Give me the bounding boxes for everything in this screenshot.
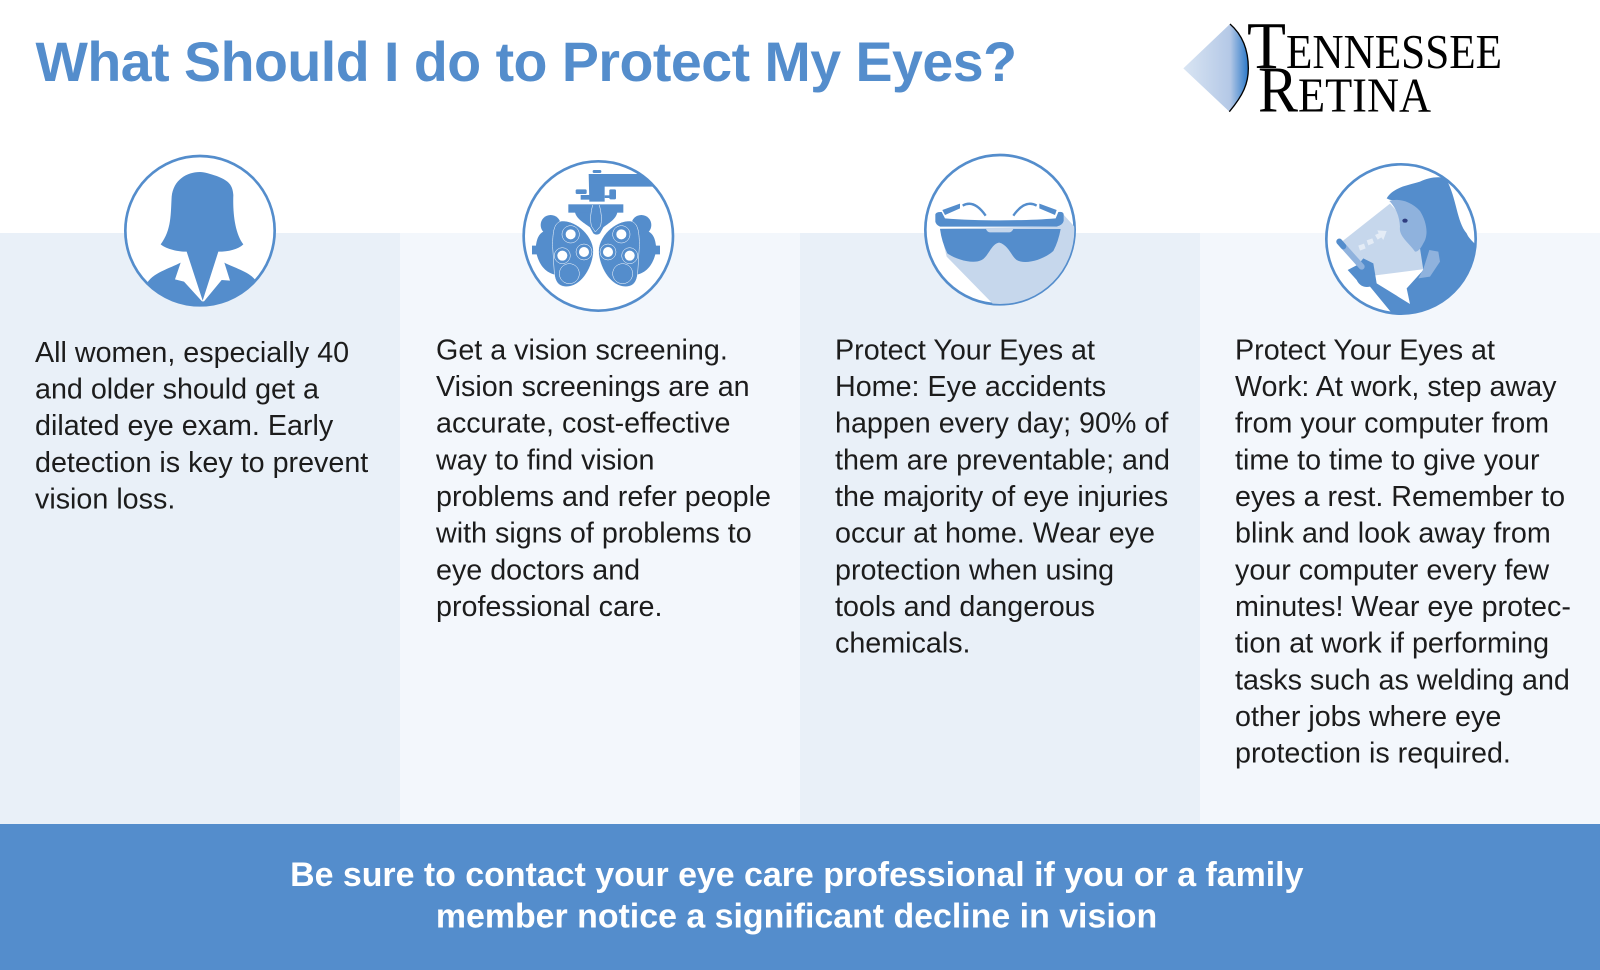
text: women's eye exam: All women, especially 40 bbox=[35, 337, 349, 369]
face bbox=[1389, 200, 1427, 252]
text: vision screening: Get a vision screening. bbox=[436, 334, 728, 366]
text: vision screening: with signs of problems to bbox=[435, 518, 752, 550]
text: women's eye exam: dilated eye exam. Early bbox=[35, 410, 334, 442]
text: vision screening: way to find vision bbox=[435, 444, 654, 476]
icon: phoropter bbox=[524, 161, 673, 311]
phone bbox=[1339, 242, 1362, 267]
text: protect eyes at work: minutes! Wear eye protec- bbox=[1235, 591, 1571, 623]
text: protect eyes at home: them are preventable; and bbox=[835, 444, 1170, 476]
text: protect eyes at work: Work: At work, step away bbox=[1235, 371, 1557, 403]
hair and body bbox=[1348, 177, 1480, 315]
text: vision screening: eye doctors and bbox=[436, 554, 640, 586]
logo text: R bbox=[1258, 54, 1298, 126]
icon: logo lens bbox=[1183, 24, 1248, 112]
text: protect eyes at work: eyes a rest. Remember to bbox=[1235, 481, 1565, 513]
eye bbox=[1402, 219, 1408, 223]
text: women's eye exam: detection is key to prevent bbox=[35, 447, 368, 479]
logo text bbox=[1247, 9, 1502, 126]
text: protect eyes at home: chemicals. bbox=[835, 628, 971, 660]
logo text: T bbox=[1247, 9, 1286, 83]
text: protect eyes at work: your computer every few bbox=[1235, 554, 1549, 586]
text: protect eyes at work: from your computer from bbox=[1235, 408, 1549, 440]
text: vision screening: accurate, cost-effective bbox=[436, 408, 730, 440]
footer message: member notice a significant decline in vision bbox=[436, 898, 1157, 936]
text: protect eyes at work: Protect Your Eyes at bbox=[1235, 334, 1495, 366]
panel: women's eye exam background bbox=[0, 233, 400, 824]
title: What Should I do to Protect My Eyes? bbox=[36, 31, 1017, 93]
light beam bbox=[1343, 204, 1432, 276]
logo: Tennessee Retina bbox=[1183, 9, 1502, 126]
text: protect eyes at home: protection when using bbox=[835, 554, 1114, 586]
text: protect eyes at work: other jobs where eye bbox=[1235, 701, 1501, 733]
text: protect eyes at home: happen every day; 90% of bbox=[835, 408, 1169, 440]
text: protect eyes at work: tion at work if performing bbox=[1235, 628, 1549, 660]
text: vision screening: Vision screenings are an bbox=[436, 371, 750, 403]
text: protect eyes at home: Protect Your Eyes at bbox=[835, 334, 1095, 366]
text: vision screening: problems and refer people bbox=[436, 481, 771, 513]
dashed arrow bbox=[1358, 230, 1387, 251]
text: protect eyes at work: time to time to give your bbox=[1235, 444, 1540, 476]
text: protect eyes at home: the majority of eye injuries bbox=[835, 481, 1168, 513]
panel: protect eyes at work background bbox=[1200, 233, 1600, 824]
text: vision screening: professional care. bbox=[436, 591, 662, 623]
neck bbox=[1418, 250, 1440, 278]
footer message: Be sure to contact your eye care professional if you or a family bbox=[290, 856, 1304, 894]
text: protect eyes at work: tasks such as welding and bbox=[1235, 664, 1570, 696]
icon: woman silhouette bbox=[125, 156, 275, 310]
footer banner bbox=[0, 824, 1600, 970]
icon: person looking at phone bbox=[1326, 164, 1480, 315]
panel: vision screening background bbox=[400, 233, 800, 824]
icon: safety glasses bbox=[925, 155, 1083, 304]
text: protect eyes at work: protection is required. bbox=[1235, 738, 1511, 770]
text: women's eye exam: vision loss. bbox=[35, 484, 175, 516]
logo text: ETINA bbox=[1298, 70, 1431, 122]
text: protect eyes at home: tools and dangerous bbox=[835, 591, 1095, 623]
text: protect eyes at home: Home: Eye accidents bbox=[835, 371, 1106, 403]
text: protect eyes at work: blink and look away from bbox=[1235, 518, 1551, 550]
logo text: ENNESSEE bbox=[1286, 26, 1502, 79]
text: protect eyes at home: occur at home. Wear eye bbox=[835, 518, 1155, 550]
panel: protect eyes at home background bbox=[800, 233, 1200, 824]
text: women's eye exam: and older should get a bbox=[35, 374, 319, 406]
